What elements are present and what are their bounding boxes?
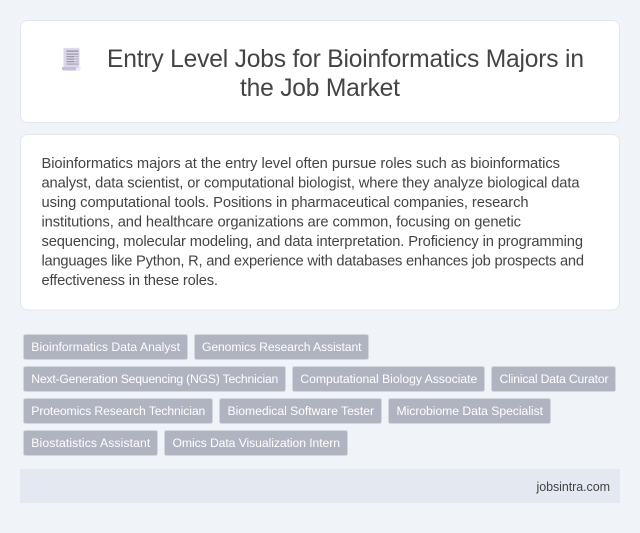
panel: header bbox=[20, 20, 620, 122]
tag: Computational Biology Associate: Computational Biology Associate bbox=[300, 372, 478, 386]
tag: Biomedical Software Tester: Biomedical Software Tester bbox=[228, 404, 374, 418]
tag: Clinical Data Curator bbox=[492, 366, 616, 392]
tag: Clinical Data Curator: Clinical Data Curator bbox=[500, 372, 608, 386]
icon: document receipt bbox=[62, 48, 81, 71]
tag: Proteomics Research Technician bbox=[24, 398, 212, 424]
tag: Omics Data Visualization Intern: Omics Data Visualization Intern bbox=[172, 436, 340, 450]
text block: description: sequencing, molecular modeling, and data interpretation. Proficiency in programming bbox=[42, 234, 583, 250]
footer source: jobsintra.com bbox=[536, 480, 610, 494]
tag: Genomics Research Assistant bbox=[194, 334, 368, 360]
text block: description: effectiveness in these roles. bbox=[42, 273, 218, 289]
tag: Biostatistics Assistant bbox=[24, 430, 158, 456]
title bbox=[107, 46, 584, 102]
text block: description: Bioinformatics majors at the entry level often pursue roles such as bioinformatics bbox=[42, 156, 560, 172]
title: Entry Level Jobs for Bioinformatics Majors in bbox=[107, 46, 584, 73]
tag: Biostatistics Assistant: Biostatistics Assistant bbox=[31, 436, 151, 450]
title: the Job Market bbox=[240, 75, 400, 102]
tag: Bioinformatics Data Analyst bbox=[24, 334, 188, 360]
tag: Microbiome Data Specialist bbox=[388, 398, 550, 424]
text block: description bbox=[42, 156, 584, 289]
panel: description bbox=[20, 134, 620, 310]
tag: Microbiome Data Specialist: Microbiome Data Specialist bbox=[396, 404, 544, 418]
tag: Proteomics Research Technician: Proteomics Research Technician bbox=[31, 404, 205, 418]
text block: description: languages like Python, R, and experience with databases enhances job prospects and bbox=[42, 254, 584, 270]
text block: description: using computational tools. Positions in pharmaceutical companies, research bbox=[42, 195, 528, 211]
tag: Computational Biology Associate bbox=[292, 366, 484, 392]
job tags bbox=[24, 334, 616, 456]
tag: Biomedical Software Tester bbox=[220, 398, 382, 424]
tag: NGS Technician bbox=[24, 366, 286, 392]
tag: NGS Technician: Next-Generation Sequencing (NGS) Technician bbox=[31, 372, 278, 386]
tag: Bioinformatics Data Analyst: Bioinformatics Data Analyst bbox=[31, 340, 181, 354]
tag: Genomics Research Assistant: Genomics Research Assistant bbox=[202, 340, 362, 354]
footer bbox=[20, 469, 620, 503]
text block: description: institutions, and healthcare organizations are common, focusing on genetic bbox=[42, 215, 521, 231]
text block: description: analyst, data scientist, or computational biologist, where they analyze biological data bbox=[42, 176, 580, 192]
tag: Omics Data Visualization Intern bbox=[164, 430, 348, 456]
